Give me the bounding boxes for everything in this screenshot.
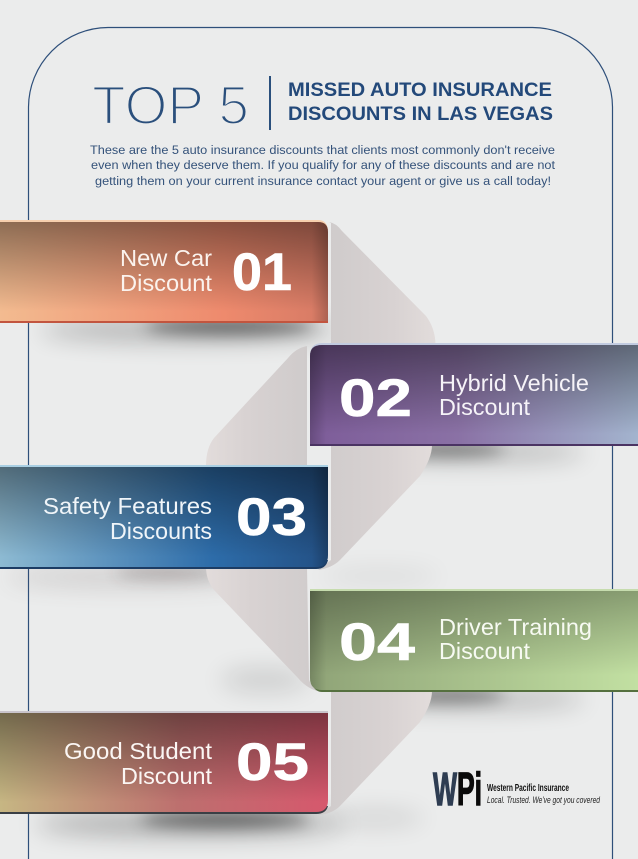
label: Discount: [439, 638, 531, 664]
label: New Car: [120, 245, 212, 271]
intro paragraph: even when they deserve them. If you qualify for any of these discounts and are not: [91, 158, 556, 172]
label: Discounts: [110, 518, 212, 544]
label: Hybrid Vehicle: [439, 370, 589, 396]
fold: 03 to 04: [206, 567, 322, 692]
label: Safety Features: [43, 493, 212, 519]
intro paragraph: getting them on your current insurance contact your agent or give us a call today!: [95, 174, 551, 188]
number: 02: [339, 369, 412, 428]
number: 01: [232, 243, 292, 302]
fold: 02 to 03: [206, 346, 307, 466]
label: Driver Training: [439, 614, 592, 640]
logo mark WPi: Pi: [457, 763, 482, 815]
intro paragraph: These are the 5 auto insurance discounts that clients most commonly don't receive: [90, 143, 555, 157]
band shadows: [5, 318, 585, 837]
label: Discount: [439, 394, 531, 420]
fold: 02 down to 03 right side: [318, 445, 432, 570]
title: TOP 5: TOP 5: [92, 74, 249, 136]
fold: 01 to 02: [329, 222, 436, 344]
logo mark WPi: W: [433, 763, 457, 815]
band 02: [310, 343, 638, 446]
subtitle: DISCOUNTS IN LAS VEGAS: [288, 103, 553, 125]
band 01: [0, 220, 328, 323]
logo name: Western Pacific Insurance: [487, 783, 569, 794]
band 03: [0, 465, 328, 569]
band 04: [310, 589, 638, 692]
number: 03: [236, 488, 307, 547]
fold: 04 to 05: [318, 691, 432, 815]
header: [90, 74, 556, 188]
logo: Western Pacific Insurance: [433, 763, 601, 815]
number: 04: [339, 613, 416, 672]
number: 05: [236, 733, 309, 792]
subtitle: MISSED AUTO INSURANCE: [288, 79, 552, 101]
label: Discount: [121, 763, 213, 789]
label: Discount: [120, 270, 213, 296]
band 05: [0, 711, 328, 814]
title divider: [269, 76, 271, 130]
paper folds connecting the bands: [206, 222, 436, 815]
label: Good Student: [64, 738, 213, 764]
